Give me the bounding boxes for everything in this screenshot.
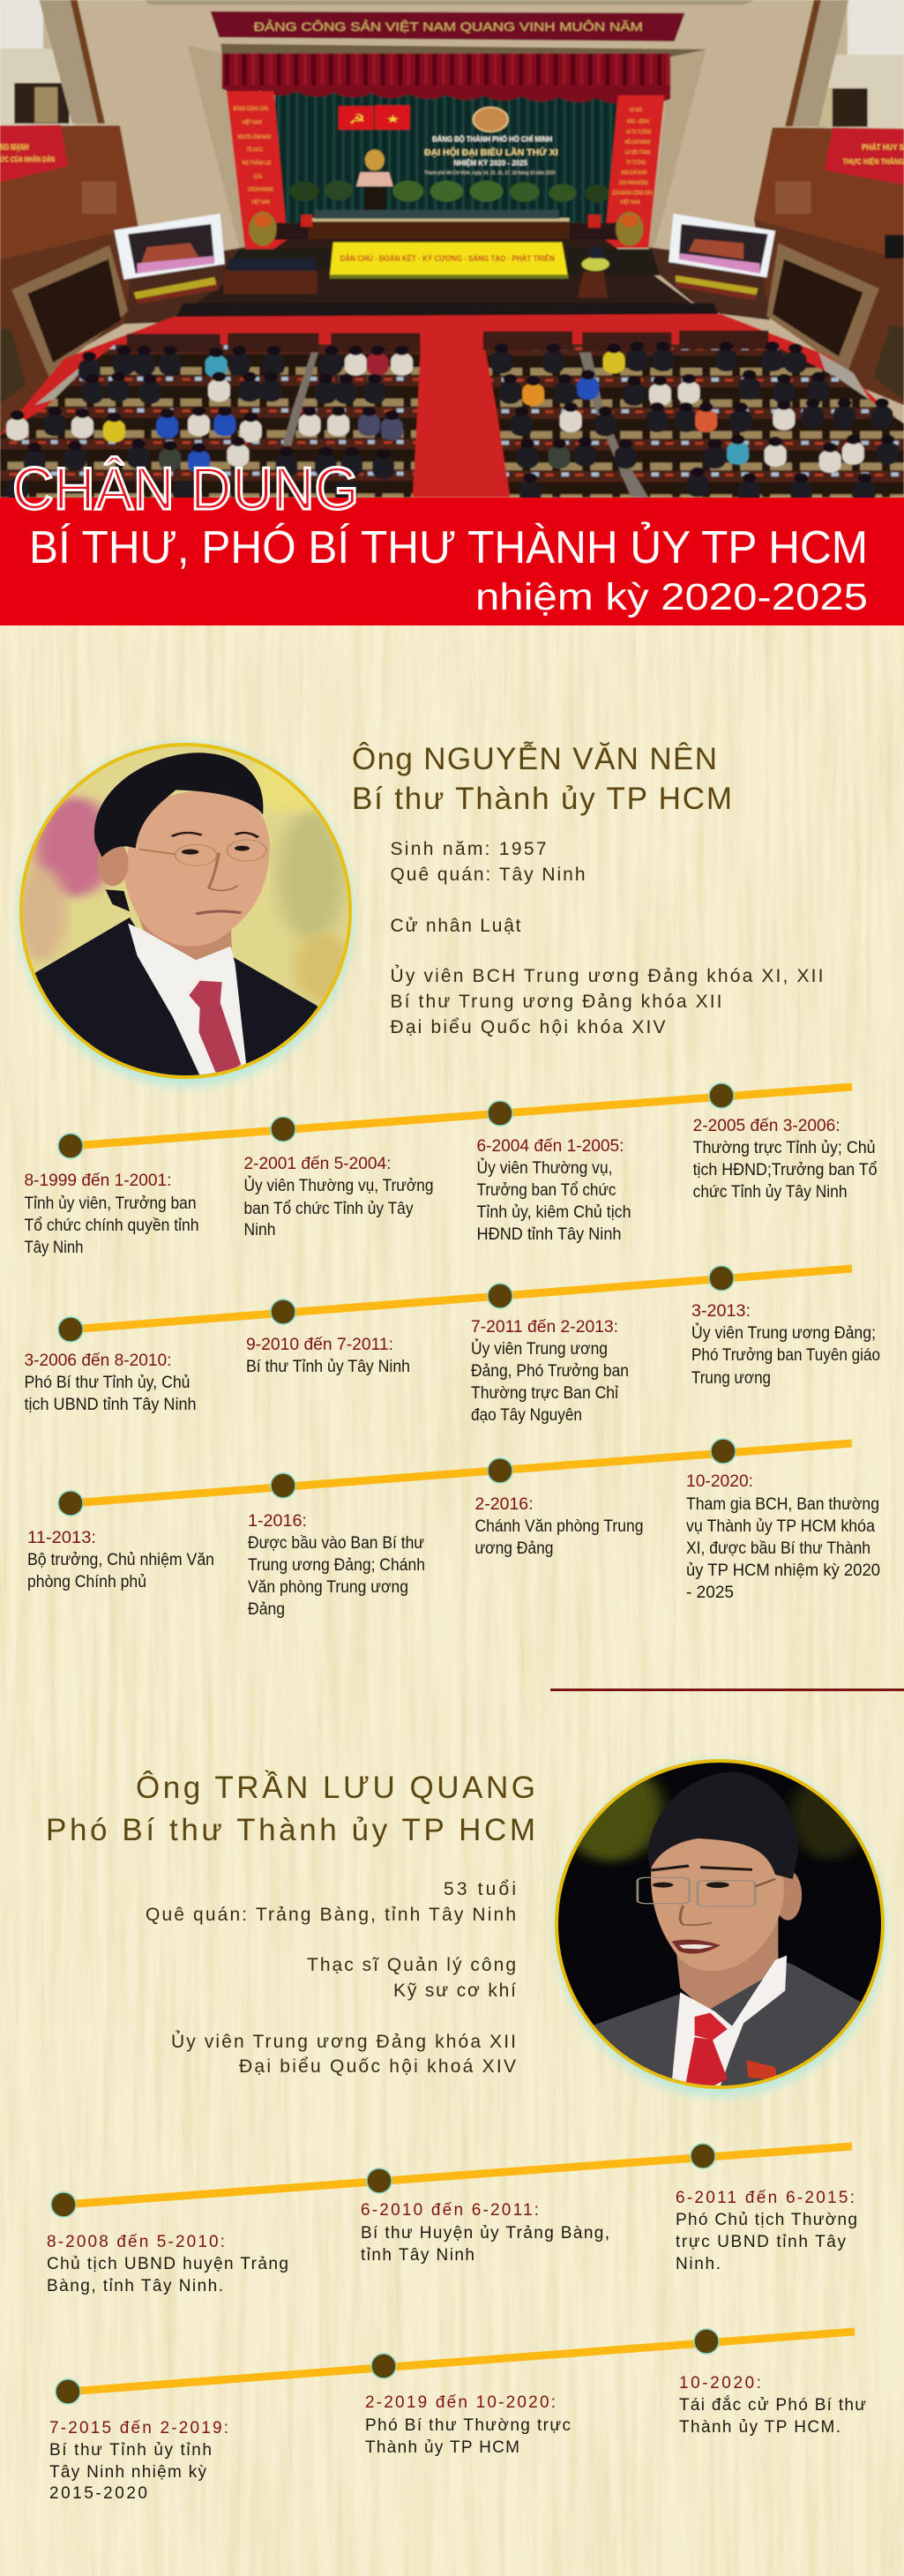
entry 2-2001: Ninh [243,1221,275,1239]
entry 7-2015: Tây Ninh nhiệm kỳ [49,2463,206,2482]
entry 6-2010: 6-2010 đến 6-2011: [361,2201,539,2220]
bust and palms [289,149,609,212]
entry 3-2013: 3-2013: [691,1302,751,1321]
entry 8-1999 [25,1172,199,1257]
speaker tables [224,246,609,298]
entry 7-2015: 7-2015 đến 2-2019: [49,2419,228,2437]
entry 6-2004: Trưởng ban Tổ chức [476,1181,616,1200]
side red banners: CHỦ NGHĨA [630,107,642,113]
entry 2-2005: 2-2005 đến 3-2006: [693,1117,840,1135]
side red banners: CÁCH MẠNG [248,186,273,192]
bio: Trần Lưu Quang: Quê quán: Trảng Bàng, tỉnh Tây Ninh [146,1905,516,1925]
curtain [222,54,670,103]
red title band [0,498,904,625]
top slogan banner: ĐẢNG CÔNG SẢN VIỆT NAM QUANG VINH MUÔN NĂM [254,19,643,34]
entry 6-2004: 6-2004 đến 1-2005: [476,1137,624,1156]
side screens [114,213,775,280]
stage backdrop: ☭ [348,112,365,126]
entry 2-2001: ban Tổ chức Tỉnh ủy Tây [243,1200,414,1218]
delegate seating, right block [483,331,904,498]
entry 3-2006: Phó Bí thư Tỉnh ủy, Chủ [25,1374,191,1392]
bio: Nguyễn Văn Nên [390,839,824,1037]
side red banners [227,91,665,249]
grey floor [34,353,870,405]
entry 6-2004: Ủy viên Thường vụ, [476,1158,612,1178]
entry 6-2011: trực UBND tỉnh Tây [676,2233,847,2251]
side red banners: MỌI THẮNG LỢI [243,160,271,166]
stage backdrop: Thành phố Hồ Chí Minh, ngày 14, 15, 16, 17, 18 tháng 10 năm 2020 [424,169,556,176]
red carpet [0,314,904,498]
entry 6-2010 [361,2201,609,2265]
entry 3-2013 [691,1302,880,1388]
side red banners: VIỆT NAM [251,198,270,206]
entry 10-2020: ủy TP HCM nhiệm kỳ 2020 [686,1561,880,1580]
entry 2-2005: Thường trực Tỉnh ủy; Chủ [693,1139,876,1157]
stage backdrop: ★ [386,114,400,125]
entry 8-2008: Chủ tịch UBND huyện Trảng [47,2255,288,2273]
entry 10-2020: 10-2020: [686,1472,753,1491]
side red banners: HỒ CHÍ MINH [625,139,650,146]
stage backdrop: ĐẢNG BỘ THÀNH PHỐ HỒ CHÍ MINH [432,135,552,144]
side red banners: CỦA ĐẢNG CỘNG SẢN [612,190,653,196]
entry 6-2010: tỉnh Tây Ninh [361,2246,474,2265]
side red banners: TƯ TƯỞNG [626,159,646,166]
delegates [18,347,888,496]
side red banners: NGƯỜI LÃNH ĐẠO [237,133,271,140]
side red banners: ĐẢNG CỘNG SẢN [234,105,268,112]
entry 6-2011: Phó Chủ tịch Thường [676,2211,857,2229]
entry 10-2020 vice secretary: 10-2020: [679,2374,761,2393]
subtitle line 1: BÍ THƯ, PHÓ BÍ THƯ THÀNH ỦY TP HCM [29,521,868,573]
entry 3-2006 [25,1352,196,1414]
bio: Trần Lưu Quang: Đại biểu Quốc hội khoá XIV [239,2056,516,2077]
entry 10-2020: - 2025 [686,1584,734,1602]
entry 11-2013 [27,1529,214,1591]
entry 7-2011 [471,1318,629,1425]
bio: Trần Lưu Quang: Kỹ sư cơ khí [393,1981,516,2001]
entry 2-2001 [243,1155,434,1239]
entry 10-2020 vice secretary: Tái đắc cử Phó Bí thư [679,2395,866,2415]
stage floor and steps [173,239,721,323]
stage backdrop: ĐẠI HỘI ĐẠI BIỂU LẦN THỨ XI [424,146,558,157]
entry 2-2016: Chánh Văn phòng Trung [474,1517,644,1536]
entry 2-2001: Ủy viên Thường vụ, Trưởng [243,1176,434,1195]
entry 9-2010: 9-2010 đến 7-2011: [246,1336,393,1354]
timeline row 3 [27,1439,880,1619]
bio: Nguyễn Văn Nên: Sinh năm: 1957 [390,839,547,859]
entry 7-2011: Ủy viên Trung ương [471,1339,608,1359]
entry 7-2015: Bí thư Tỉnh ủy tỉnh [49,2441,212,2460]
entry 1-2016: 1-2016: [248,1512,307,1531]
entry 2-2001: 2-2001 đến 5-2004: [243,1155,392,1173]
lower wall under screens [123,247,770,324]
entry 2-2005 [693,1117,878,1202]
entry 7-2011: Đảng, Phó Trưởng ban [471,1362,629,1381]
entry 11-2013: 11-2013: [27,1529,96,1547]
entry 3-2013: Trung ương [691,1369,771,1388]
entry 2-2016: 2-2016: [474,1495,533,1514]
timeline row 2 [25,1266,880,1425]
flowers [249,212,643,246]
entry 10-2020 vice secretary: Thành ủy TP HCM. [679,2418,840,2437]
entry 6-2011 [676,2189,857,2273]
top slogan banner [211,11,684,41]
entry 1-2016: Được bầu vào Ban Bí thư [248,1534,424,1553]
timeline row 4 [47,2144,857,2295]
title: CHÂN DUNG: CHÂN DUNG [12,455,359,522]
entry 6-2004: HĐND tỉnh Tây Ninh [476,1225,621,1244]
columns [39,0,848,259]
bio: Trần Lưu Quang: Ủy viên Trung ương Đảng khóa XII [171,2031,516,2052]
name heading: Nguyễn Văn Nên: Ông NGUYỄN VĂN NÊN [352,741,717,776]
entry 8-2008 [47,2233,288,2295]
entry 10-2020: XI, được bầu Bí thư Thành [686,1539,870,1558]
entry 11-2013: Bộ trưởng, Chủ nhiệm Văn [27,1551,214,1569]
yellow banner [330,243,568,279]
name heading: Trần Lưu Quang: Ông TRẦN LƯU QUANG [136,1770,535,1805]
bio: Nguyễn Văn Nên: Cử nhân Luật [390,916,521,936]
left wall: NG MẠNH [0,142,29,152]
bio: Nguyễn Văn Nên: Ủy viên BCH Trung ương Đảng khóa XI, XII [390,965,824,986]
entry 6-2004: Tỉnh ủy, kiêm Chủ tịch [476,1203,631,1222]
side red banners: LÀ NỀN TẢNG [625,148,650,155]
entry 3-2006: tịch UBND tỉnh Tây Ninh [25,1396,196,1414]
header photo: congress hall [0,0,904,498]
entry 1-2016: Đảng [248,1600,285,1619]
portrait: Nguyễn Văn Nên [0,735,369,1088]
upper side walls [0,0,904,130]
side red banners: CHO HÀNH ĐỘNG [619,179,648,186]
entry 1-2016 [248,1512,425,1619]
side red banners: MÁC - LÊNIN [627,118,649,124]
entry 2-2016 [474,1495,644,1558]
entry 2-2005: tịch HĐND;Trưởng ban Tổ [693,1161,878,1179]
side red banners: VÀ TƯ TƯỞNG [626,129,652,135]
entry 2-2019: Thành ủy TP HCM [365,2438,519,2457]
bio: Nguyễn Văn Nên: Bí thư Trung ương Đảng khóa XII [390,992,721,1012]
entry 1-2016: Trung ương Đảng; Chánh [248,1556,425,1575]
flower boxes [132,274,758,303]
side red banners: TỔ CHỨC [247,146,263,153]
stage backdrop: NHIỆM KỲ 2020 - 2025 [453,159,528,168]
entry 3-2013: Ủy viên Trung ương Đảng; [691,1323,876,1343]
entry 2-2019: Phó Bí thư Thường trực [365,2416,571,2435]
timeline row 1 [25,1083,878,1257]
entry 7-2015: 2015-2020 [49,2484,147,2503]
entry 3-2013: Phó Trưởng ban Tuyên giáo [691,1346,880,1365]
bio: Nguyễn Văn Nên: Quê quán: Tây Ninh [390,865,586,885]
yellow banner: DÂN CHỦ - ĐOÀN KẾT - KỶ CƯƠNG - SÁNG TẠO - PHÁT TRIỂN [340,254,555,264]
entry 6-2011: Ninh. [676,2255,721,2273]
bio: Nguyễn Văn Nên: Đại biểu Quốc hội khóa XIV [390,1017,665,1037]
bio: Trần Lưu Quang [146,1879,516,2077]
stage backdrop [275,91,618,223]
entry 6-2004 [476,1137,631,1244]
side red banners: VIỆT NAM [620,198,639,206]
entry 6-2010: Bí thư Huyện ủy Trảng Bàng, [361,2224,609,2243]
delegate seating, left block [0,333,421,498]
entry 2-2019 [365,2393,571,2457]
entry 7-2011: Thường trực Ban Chỉ [471,1384,619,1403]
side red banners: KIM CHỈ NAM [622,169,646,176]
entry 10-2020: Tham gia BCH, Ban thường [686,1495,879,1514]
name heading: Trần Lưu Quang [46,1770,535,1847]
stage ceiling [220,44,706,56]
entry 10-2020 vice secretary [679,2374,866,2437]
entry 1-2016: Văn phòng Trung ương [248,1578,408,1597]
name heading: Nguyễn Văn Nên [352,741,732,816]
entry 9-2010 [246,1336,410,1376]
name heading: Nguyễn Văn Nên: Bí thư Thành ủy TP HCM [352,782,732,816]
entry 8-2008: Bàng, tỉnh Tây Ninh. [47,2277,223,2295]
name heading: Trần Lưu Quang: Phó Bí thư Thành ủy TP HCM [46,1813,535,1847]
entry 10-2020 [686,1472,880,1602]
entry 8-2008: 8-2008 đến 5-2010: [47,2233,225,2251]
entry 7-2011: đạo Tây Nguyên [471,1406,582,1425]
bio: Trần Lưu Quang: 53 tuổi [444,1879,516,1899]
left wall: ỨC CỦA NHÂN DÂN [0,155,55,164]
entry 3-2006: 3-2006 đến 8-2010: [25,1352,171,1370]
entry 2-2019: 2-2019 đến 10-2020: [365,2393,556,2412]
entry 9-2010: Bí thư Tỉnh ủy Tây Ninh [246,1358,410,1376]
left wall [0,124,138,436]
entry 8-1999: 8-1999 đến 1-2001: [25,1172,171,1190]
entry 6-2011: 6-2011 đến 6-2015: [676,2189,855,2207]
timeline row 5 [49,2329,866,2503]
bio: Trần Lưu Quang: Thạc sĩ Quản lý công [307,1955,516,1975]
entry 8-1999: Tỉnh ủy viên, Trưởng ban [25,1194,196,1213]
entry 8-1999: Tây Ninh [25,1239,83,1257]
head table [275,210,618,240]
subtitle line 2: nhiệm kỳ 2020-2025 [475,576,868,618]
side red banners: CỦA [254,173,262,180]
right wall [754,128,904,405]
entry 11-2013: phòng Chính phủ [27,1573,146,1591]
entry 2-2016: ương Đảng [474,1539,554,1558]
entry 8-1999: Tổ chức chính quyền tỉnh [25,1217,199,1235]
side red banners: VIỆT NAM [243,119,262,125]
entry 10-2020: vụ Thành ủy TP HCM khóa [686,1517,875,1536]
entry 2-2005: chức Tỉnh ủy Tây Ninh [693,1183,848,1202]
portrait: Trần Lưu Quang [548,1756,893,2097]
entry 7-2011: 7-2011 đến 2-2013: [471,1318,618,1337]
entry 7-2015 [49,2419,228,2503]
